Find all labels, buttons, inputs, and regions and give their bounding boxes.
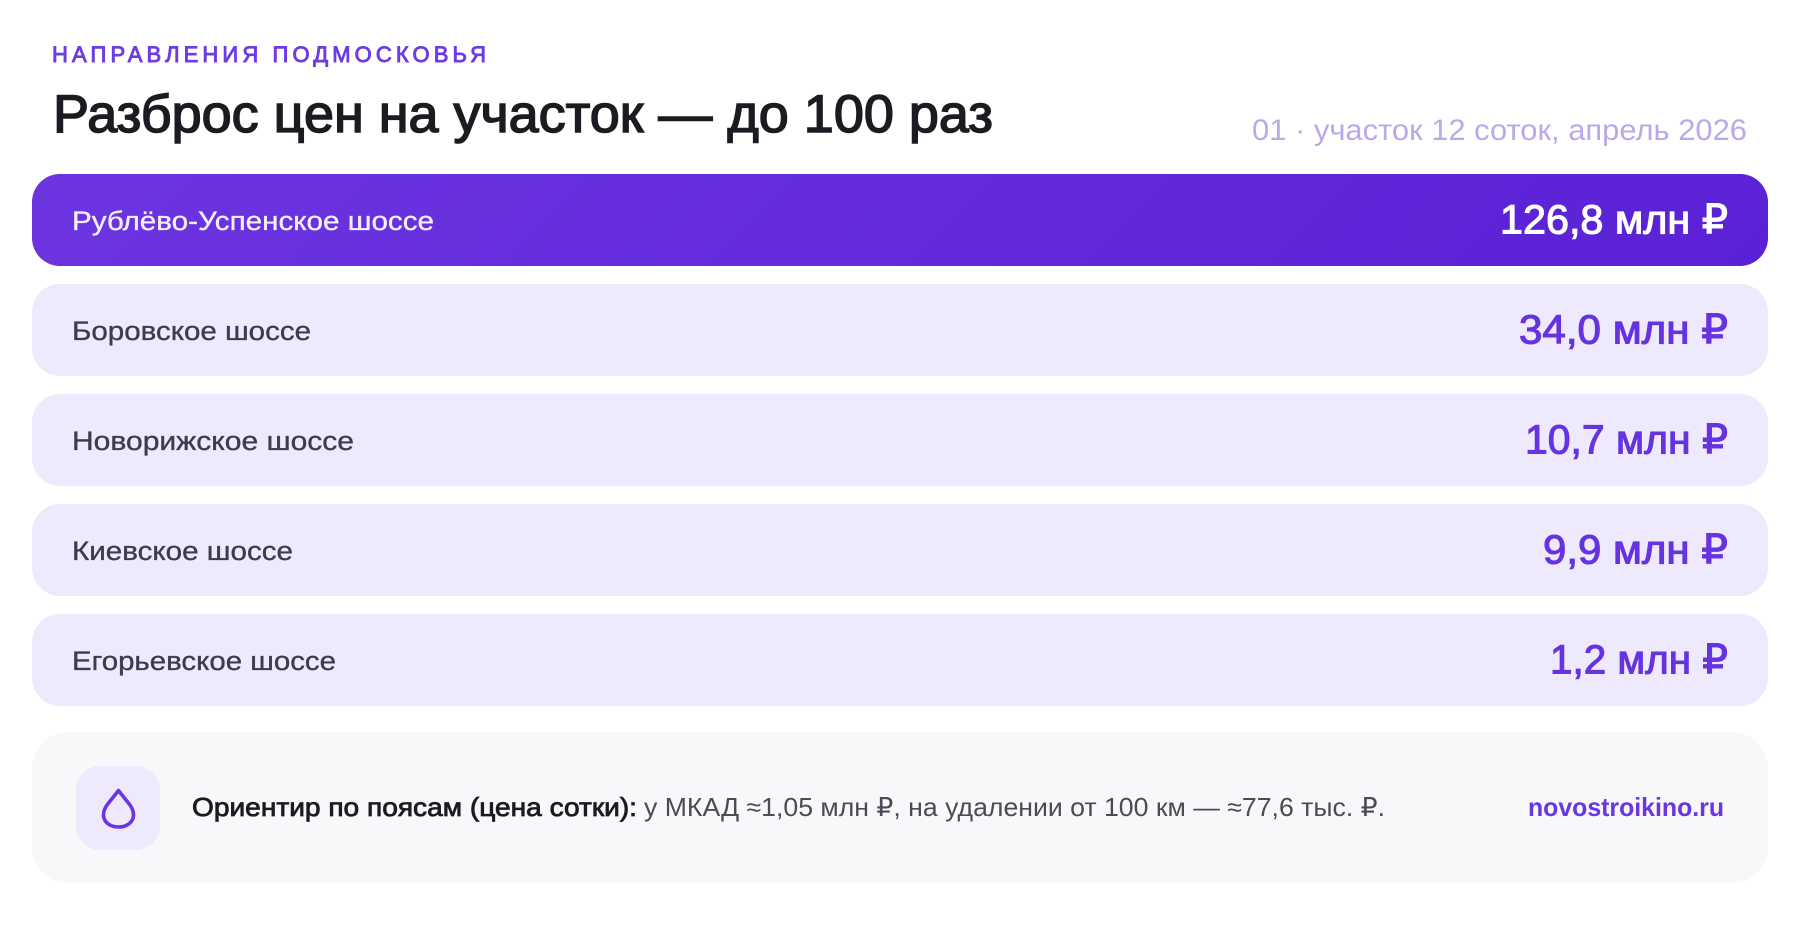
row: Киевское шоссе — [32, 504, 1768, 596]
row: Егорьевское шоссе: 1,2 млн ₽ — [1550, 636, 1728, 682]
row: Боровское шоссе — [32, 284, 1768, 376]
footer bold text: Ориентир по поясам (цена сотки): — [192, 792, 637, 822]
panel: footer note — [32, 732, 1768, 883]
icon: water drop — [76, 766, 160, 850]
footer site link: novostroikino.ru — [1528, 792, 1724, 822]
row: Боровское шоссе: Боровское шоссе — [72, 316, 311, 346]
row: Рублёво-Успенское шоссе: 126,8 млн ₽ — [1500, 196, 1728, 242]
row: Новорижское шоссе: Новорижское шоссе — [72, 426, 354, 456]
row: Егорьевское шоссе — [32, 614, 1768, 706]
row: Киевское шоссе: 9,9 млн ₽ — [1543, 526, 1728, 572]
subtitle: 01 · участок 12 соток, апрель 2026 — [1252, 114, 1747, 147]
row: Боровское шоссе: 34,0 млн ₽ — [1519, 306, 1728, 352]
eyebrow heading: НАПРАВЛЕНИЯ ПОДМОСКОВЬЯ — [52, 42, 486, 67]
row: Рублёво-Успенское шоссе — [32, 174, 1768, 266]
title: Разброс цен на участок — до 100 раз — [53, 85, 993, 144]
row: Киевское шоссе: Киевское шоссе — [72, 536, 293, 566]
row: Рублёво-Успенское шоссе: Рублёво-Успенское шоссе — [72, 206, 434, 236]
row: Егорьевское шоссе: Егорьевское шоссе — [72, 646, 336, 676]
row: Новорижское шоссе: 10,7 млн ₽ — [1525, 416, 1728, 462]
row: Новорижское шоссе — [32, 394, 1768, 486]
footer regular text: у МКАД ≈1,05 млн ₽, на удалении от 100 км — ≈77,6 тыс. ₽. — [644, 792, 1385, 822]
